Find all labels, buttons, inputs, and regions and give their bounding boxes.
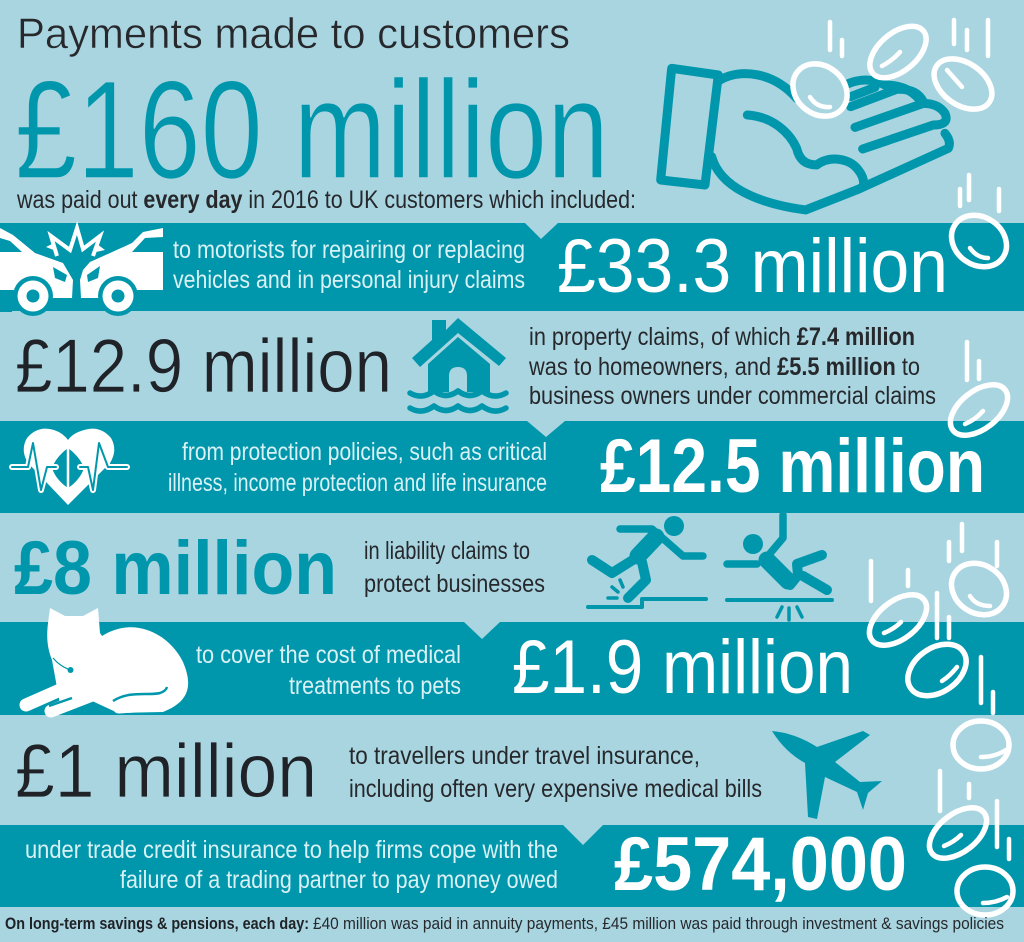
property text: business owners under commercial claims [529,382,936,410]
travel text [349,742,762,803]
band: motorists [0,223,1024,311]
pets text [196,641,461,700]
coins: bottom group [920,771,1013,915]
motorists text: vehicles and in personal injury claims [173,266,525,294]
figure: £1 million: £1 million [15,729,317,814]
coins: middle group [860,524,1017,769]
motorists text [173,236,525,294]
icon: car crash [0,228,163,316]
travel text: including often very expensive medical bills [349,775,762,803]
icon: person falling [727,515,832,620]
liability text: protect businesses [364,570,545,598]
property text [528,323,936,410]
pets text: treatments to pets [289,672,461,700]
icon: plane [772,731,882,819]
icon: flooded house [410,318,506,411]
footer note [5,914,1004,933]
icon: person tripping [588,516,706,607]
intro text: was paid out every day in 2016 to UK customers which included: [16,186,636,214]
motorists text: to motorists for repairing or replacing [173,236,525,264]
property text: was to homeowners, and £5.5 million to [528,353,920,381]
protection text [168,438,547,497]
figure: £12.9 million: £12.9 million [15,324,392,409]
trade credit text: under trade credit insurance to help firms cope with the [25,836,558,864]
band: pets [0,622,1024,715]
protection text: illness, income protection and life insurance [168,469,547,497]
icon: heart with pulse [12,429,127,505]
protection text: from protection policies, such as critical [182,438,547,466]
coins: top group [782,16,1017,277]
pets text: to cover the cost of medical [196,641,461,669]
coin: property row [941,342,1017,445]
icon: cat [26,608,188,713]
title: Payments made to customers [17,10,570,58]
property text: in property claims, of which £7.4 million [529,323,915,351]
trade credit text: failure of a trading partner to pay money owed [120,866,558,894]
icon: hand [661,68,949,210]
figure: £33.3 million: £33.3 million [557,224,948,309]
headline figure: £160 million: £160 million [15,51,609,208]
figure: £8 million: £8 million [14,526,337,611]
liability text: in liability claims to [364,537,530,565]
travel text: to travellers under travel insurance, [349,742,700,770]
trade credit text [25,836,558,894]
band: protection [0,421,1024,513]
liability text [364,537,545,598]
footer note: On long-term savings & pensions, each day: [5,914,309,933]
figure: £574,000: £574,000 [614,822,907,907]
figure: £1.9 million: £1.9 million [512,625,853,710]
band: trade credit [0,825,1024,907]
